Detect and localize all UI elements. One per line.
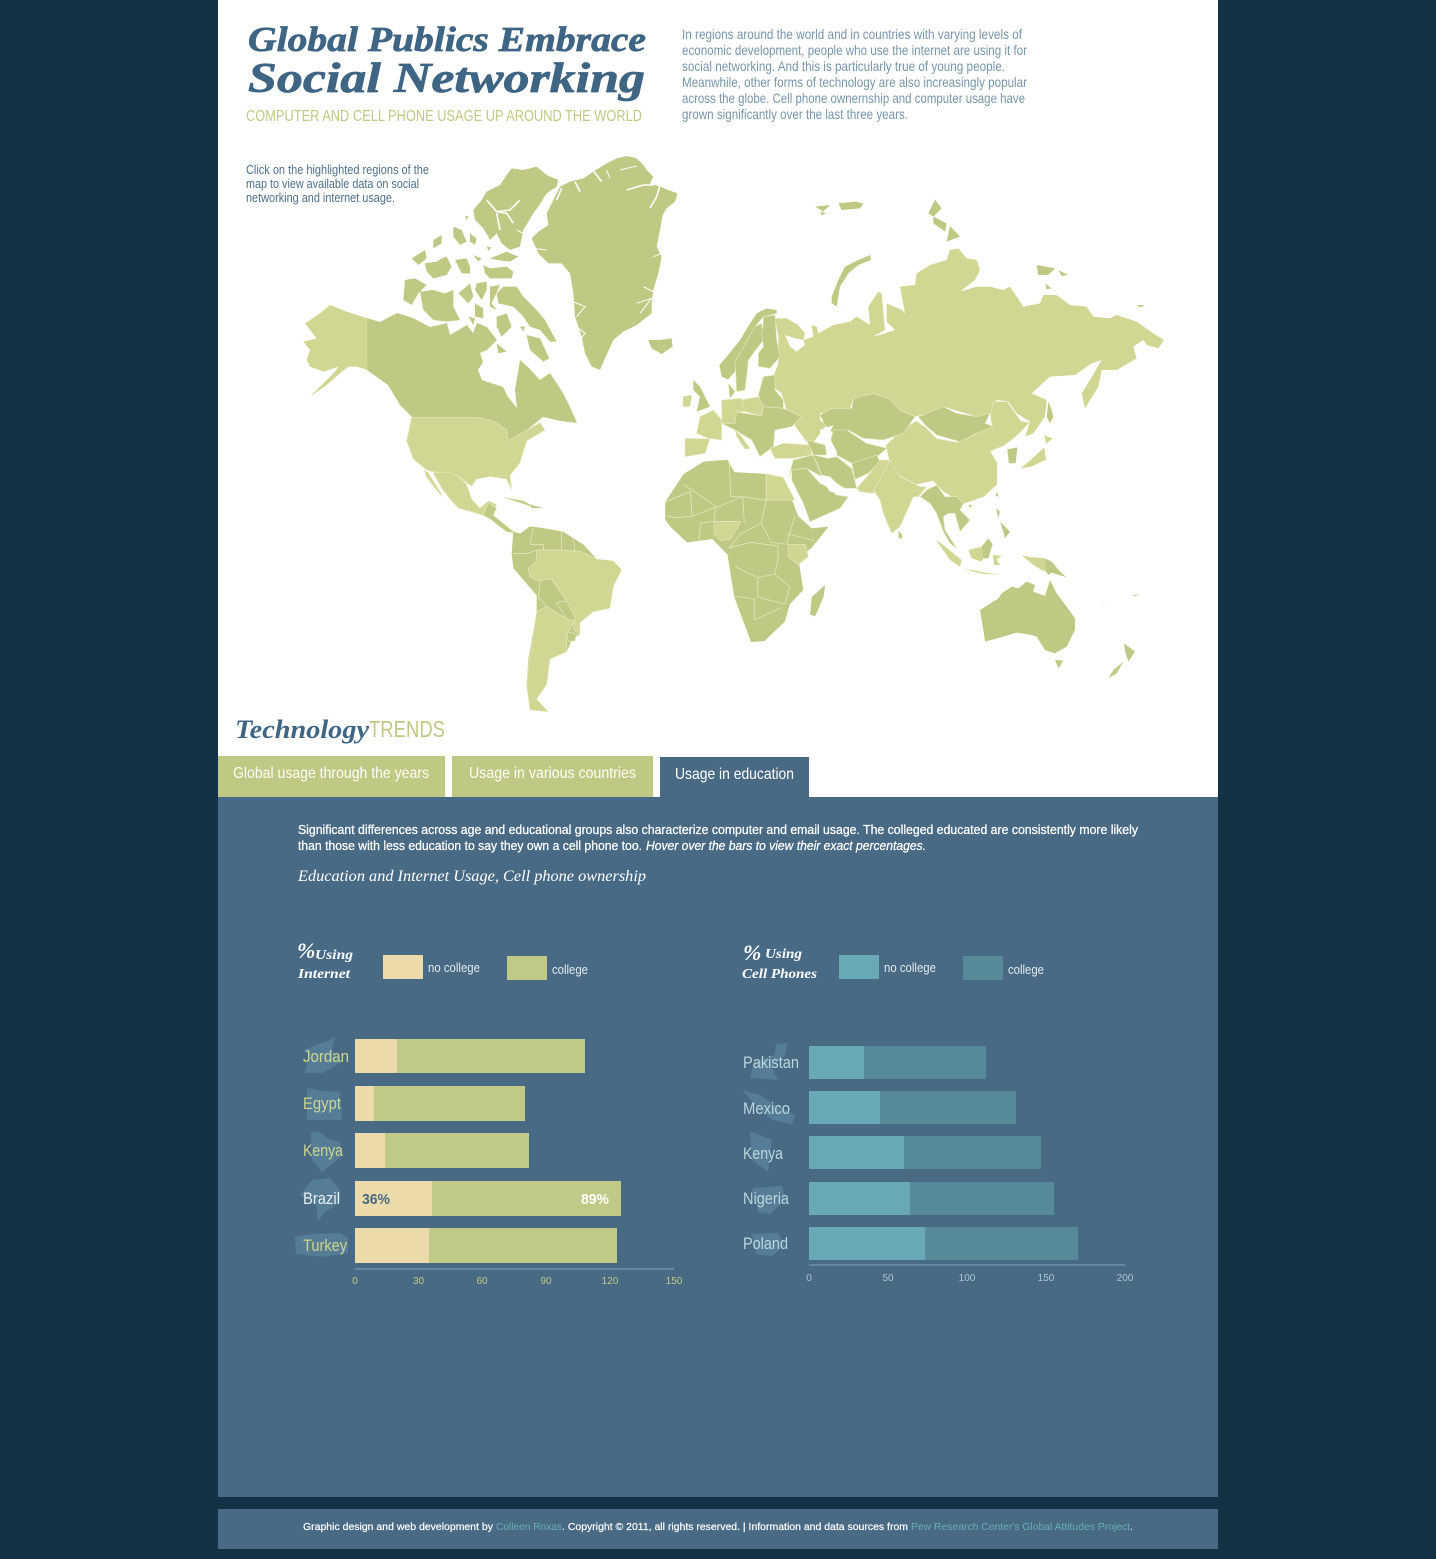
Pacific islands xyxy=(1102,594,1140,607)
Iceland xyxy=(648,338,673,354)
axis: internet: 30 xyxy=(413,1276,424,1287)
footer: . xyxy=(1130,1521,1133,1533)
Russia xyxy=(773,248,1164,447)
legend: cell phones: no college xyxy=(884,960,936,975)
New Zealand xyxy=(1108,643,1135,678)
bars: Brazil: Brazil xyxy=(303,1189,340,1208)
axis: internet: 150 xyxy=(666,1276,683,1287)
bars: Brazil: 89% xyxy=(581,1191,609,1208)
Baltic states and Belarus xyxy=(758,375,783,408)
axis: cell phones: 150 xyxy=(1038,1273,1055,1284)
British Isles xyxy=(683,380,710,412)
tab: global usage: Global usage through the years xyxy=(233,765,429,782)
axis: internet: 60 xyxy=(476,1276,488,1287)
Eastern Europe xyxy=(722,407,802,457)
New Guinea xyxy=(1022,555,1067,577)
Greenland xyxy=(532,156,678,370)
Sakhalin xyxy=(1047,402,1053,423)
map instructions: networking and internet usage. xyxy=(246,190,395,205)
intro paragraph: economic development, people who use the internet are using it for xyxy=(682,42,1027,58)
panel description: than those with less education to say they own a cell phone too. xyxy=(298,839,642,853)
Arctic Russian islands xyxy=(815,199,1145,310)
Canada xyxy=(367,313,577,441)
chart: internet use by education xyxy=(295,938,683,1287)
Mongolia xyxy=(918,407,993,442)
axis: internet xyxy=(352,1268,683,1287)
axis: internet: 90 xyxy=(540,1276,552,1287)
Tasmania xyxy=(1055,660,1063,668)
legend: cell phones xyxy=(742,940,1044,982)
United States xyxy=(407,417,545,490)
legend: cell phones: Using xyxy=(765,947,802,962)
Korea xyxy=(1007,447,1017,463)
axis: cell phones xyxy=(806,1264,1134,1284)
title xyxy=(248,20,646,102)
bars: Mexico xyxy=(743,1091,1016,1124)
Kazakhstan xyxy=(820,393,915,440)
Norway xyxy=(719,308,777,379)
intro paragraph: across the globe. Cell phone ownernship and computer usage have xyxy=(682,90,1025,106)
intro paragraph: social networking. And this is particularly true of young people. xyxy=(682,58,1005,74)
Germany xyxy=(722,398,745,423)
bars: Pakistan xyxy=(743,1046,986,1079)
axis: cell phones: 50 xyxy=(882,1273,894,1284)
map: Russia and northern Asia xyxy=(773,199,1164,447)
Arctic islands xyxy=(403,167,558,362)
map: China and Far East xyxy=(886,402,1053,504)
map: Africa and Madagascar xyxy=(665,460,829,642)
bars: Turkey: Turkey xyxy=(303,1236,347,1255)
map: Arctic North America and Greenland xyxy=(403,156,678,370)
footer xyxy=(218,1509,1218,1549)
axis: internet: 0 xyxy=(352,1276,358,1287)
tab: global usage xyxy=(218,756,445,797)
Sweden xyxy=(735,323,763,392)
map: Europe xyxy=(683,308,802,457)
legend: cell phones: Cell Phones xyxy=(742,967,818,982)
tab: various countries xyxy=(452,756,653,797)
Caspian Sea xyxy=(820,425,837,458)
bars: Kenya xyxy=(303,1133,529,1168)
bars: Mexico: Mexico xyxy=(743,1099,790,1118)
bars: Jordan: Jordan xyxy=(303,1047,349,1066)
axis: cell phones: 200 xyxy=(1117,1273,1134,1284)
Finland xyxy=(758,315,780,368)
intro paragraph: Meanwhile, other forms of technology are also increasingly popular xyxy=(682,74,1027,90)
world map xyxy=(303,156,1164,712)
title: Social Networking xyxy=(248,56,645,102)
legend: internet: Using xyxy=(315,948,353,963)
Central Asia xyxy=(830,430,887,463)
legend: internet: % xyxy=(297,938,315,963)
White Sea xyxy=(785,335,805,352)
legend: internet: no college xyxy=(428,960,480,975)
Turkey xyxy=(770,443,812,458)
Caucasus xyxy=(807,440,827,455)
panel: education xyxy=(218,797,1218,1497)
bars: Turkey xyxy=(303,1228,617,1263)
country silhouettes: cell phones xyxy=(742,1043,795,1256)
bars: Jordan xyxy=(303,1039,585,1073)
section heading xyxy=(235,715,445,744)
Central America and Caribbean xyxy=(483,497,543,534)
Sri Lanka xyxy=(898,531,902,538)
Pakistan xyxy=(857,460,890,493)
Alaska xyxy=(303,305,367,397)
map instructions: map to view available data on social xyxy=(246,176,419,191)
section heading: Technology xyxy=(235,715,369,744)
bars: Poland: Poland xyxy=(743,1234,788,1253)
footer: Colleen Roxas xyxy=(496,1521,562,1533)
Persian Gulf xyxy=(822,478,840,493)
country silhouettes: internet xyxy=(295,1037,348,1257)
tab: education xyxy=(660,757,809,798)
legend: internet: Internet xyxy=(297,967,351,982)
legend: cell phones: college xyxy=(1008,962,1044,977)
China xyxy=(886,402,1029,504)
panel description: Significant differences across age and educational groups also characterize computer and email usage. The colleged educated are consistently more likely xyxy=(298,823,1139,837)
map: Americas below Canada xyxy=(407,417,622,712)
bars: Pakistan: Pakistan xyxy=(743,1053,799,1072)
India xyxy=(873,460,927,533)
Indonesia and Philippines xyxy=(936,492,1010,575)
intro paragraph xyxy=(682,26,1027,122)
section heading: TRENDS xyxy=(369,716,445,742)
axis: cell phones: 0 xyxy=(806,1273,812,1284)
bars: Egypt: Egypt xyxy=(303,1094,341,1113)
Italy xyxy=(735,430,750,449)
Iberia xyxy=(685,438,710,457)
title: Global Publics Embrace xyxy=(248,20,646,59)
map instructions: Click on the highlighted regions of the xyxy=(246,162,429,177)
bars: Kenya: Kenya xyxy=(743,1144,783,1163)
footer: . Copyright © 2011, all rights reserved. | Information and data sources from xyxy=(562,1521,908,1533)
bars: Brazil: 36% xyxy=(362,1191,390,1208)
map: Southeast Asia and Oceania xyxy=(920,485,1140,678)
intro paragraph: grown significantly over the last three years. xyxy=(682,106,908,122)
legend: internet xyxy=(297,938,588,982)
bars: Nigeria xyxy=(743,1182,1054,1215)
Arabian Peninsula xyxy=(792,468,848,522)
footer: Pew Research Center's Global Attitudes Project xyxy=(911,1521,1130,1533)
legend: internet: college xyxy=(552,962,588,977)
Denmark xyxy=(728,383,735,398)
South America xyxy=(512,526,622,712)
map: Middle East and South Asia xyxy=(770,425,927,538)
footer: Graphic design and web development by xyxy=(303,1521,494,1533)
Japan xyxy=(1021,435,1053,469)
tab: various countries: Usage in various countries xyxy=(469,765,636,782)
tab: education: Usage in education xyxy=(675,766,794,783)
white content sheet xyxy=(218,0,1218,798)
Poland xyxy=(742,397,763,416)
Mexico xyxy=(424,470,497,515)
axis: internet: 120 xyxy=(602,1276,619,1287)
chart: cell phone ownership by education xyxy=(742,940,1134,1284)
Afghanistan xyxy=(852,455,880,479)
legend: cell phones: % xyxy=(743,940,761,965)
France xyxy=(697,410,722,440)
bars: Kenya xyxy=(743,1136,1041,1169)
bars: Kenya: Kenya xyxy=(303,1141,343,1160)
Levant and Iraq xyxy=(788,455,822,478)
chart heading: Education and Internet Usage, Cell phone ownership xyxy=(297,868,646,885)
subtitle: COMPUTER AND CELL PHONE USAGE UP AROUND THE WORLD xyxy=(246,108,642,125)
bars: Poland xyxy=(743,1227,1078,1260)
panel description: Hover over the bars to view their exact percentages. xyxy=(646,839,926,853)
map instructions xyxy=(246,162,429,205)
Iran xyxy=(813,455,857,488)
intro paragraph: In regions around the world and in countries with varying levels of xyxy=(682,26,1022,42)
map: Kazakhstan and Mongolia xyxy=(820,393,993,442)
Australia xyxy=(980,580,1075,653)
bars: Nigeria: Nigeria xyxy=(743,1189,789,1208)
axis: cell phones: 100 xyxy=(959,1273,976,1284)
bars: Egypt xyxy=(303,1086,525,1121)
bars: Brazil xyxy=(303,1181,621,1216)
Southeast Asia mainland xyxy=(920,485,970,548)
panel description xyxy=(298,823,1139,853)
